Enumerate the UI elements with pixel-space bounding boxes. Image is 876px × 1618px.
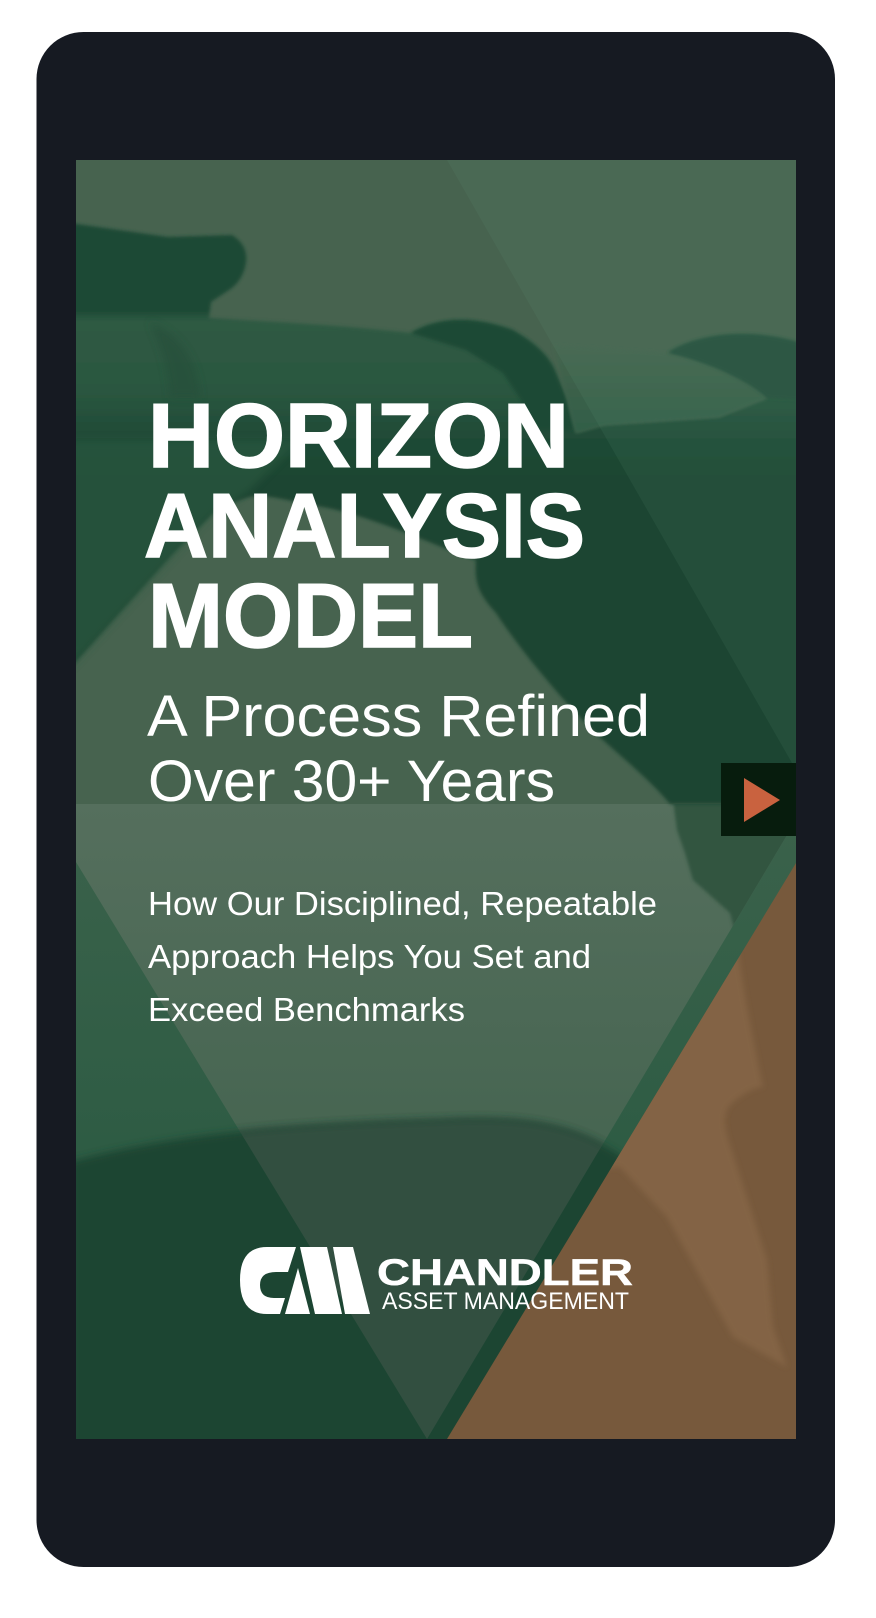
diagonal lighter plane: [601, 337, 796, 763]
ring band: [411, 318, 570, 417]
description text: Approach Helps You Set and: [148, 938, 591, 975]
icon: play triangle: [744, 778, 780, 822]
vertical pipe clamp shade: [150, 322, 200, 398]
lighter brown photo shape: [610, 956, 782, 1362]
icon: CM mark: [240, 1247, 370, 1314]
hand silhouette in triangle: [673, 804, 786, 926]
logo wordmark: CHANDLER: [377, 1252, 633, 1293]
lower translucent triangle: [76, 804, 734, 1144]
subtitle: A Process Refined: [147, 684, 650, 749]
upper background: [76, 160, 796, 804]
title: HORIZON: [148, 386, 569, 487]
left medium shade: [76, 444, 286, 656]
title: ANALYSIS: [144, 476, 585, 577]
description text: How Our Disciplined, Repeatable: [148, 885, 657, 922]
button box: [721, 763, 796, 836]
title: [144, 386, 585, 667]
top right dark shape: [668, 334, 800, 400]
dark arch in lower photo: [76, 1114, 620, 1439]
play button: [721, 763, 796, 836]
lower background: [76, 836, 796, 1166]
description text: [148, 885, 657, 1028]
dark upper photo shape: [70, 223, 800, 804]
pale pipe tip: [563, 375, 762, 431]
title: MODEL: [148, 566, 473, 667]
subtitle: Over 30+ Years: [148, 749, 555, 814]
logo tagline: ASSET MANAGEMENT: [382, 1288, 629, 1315]
subtitle: [147, 684, 650, 814]
description text: Exceed Benchmarks: [148, 991, 465, 1028]
panel: cover artwork: [70, 160, 800, 1450]
logo: Chandler Asset Management: [240, 1247, 633, 1315]
brown triangle: [447, 863, 796, 1439]
arch inside triangle: [242, 1122, 601, 1438]
